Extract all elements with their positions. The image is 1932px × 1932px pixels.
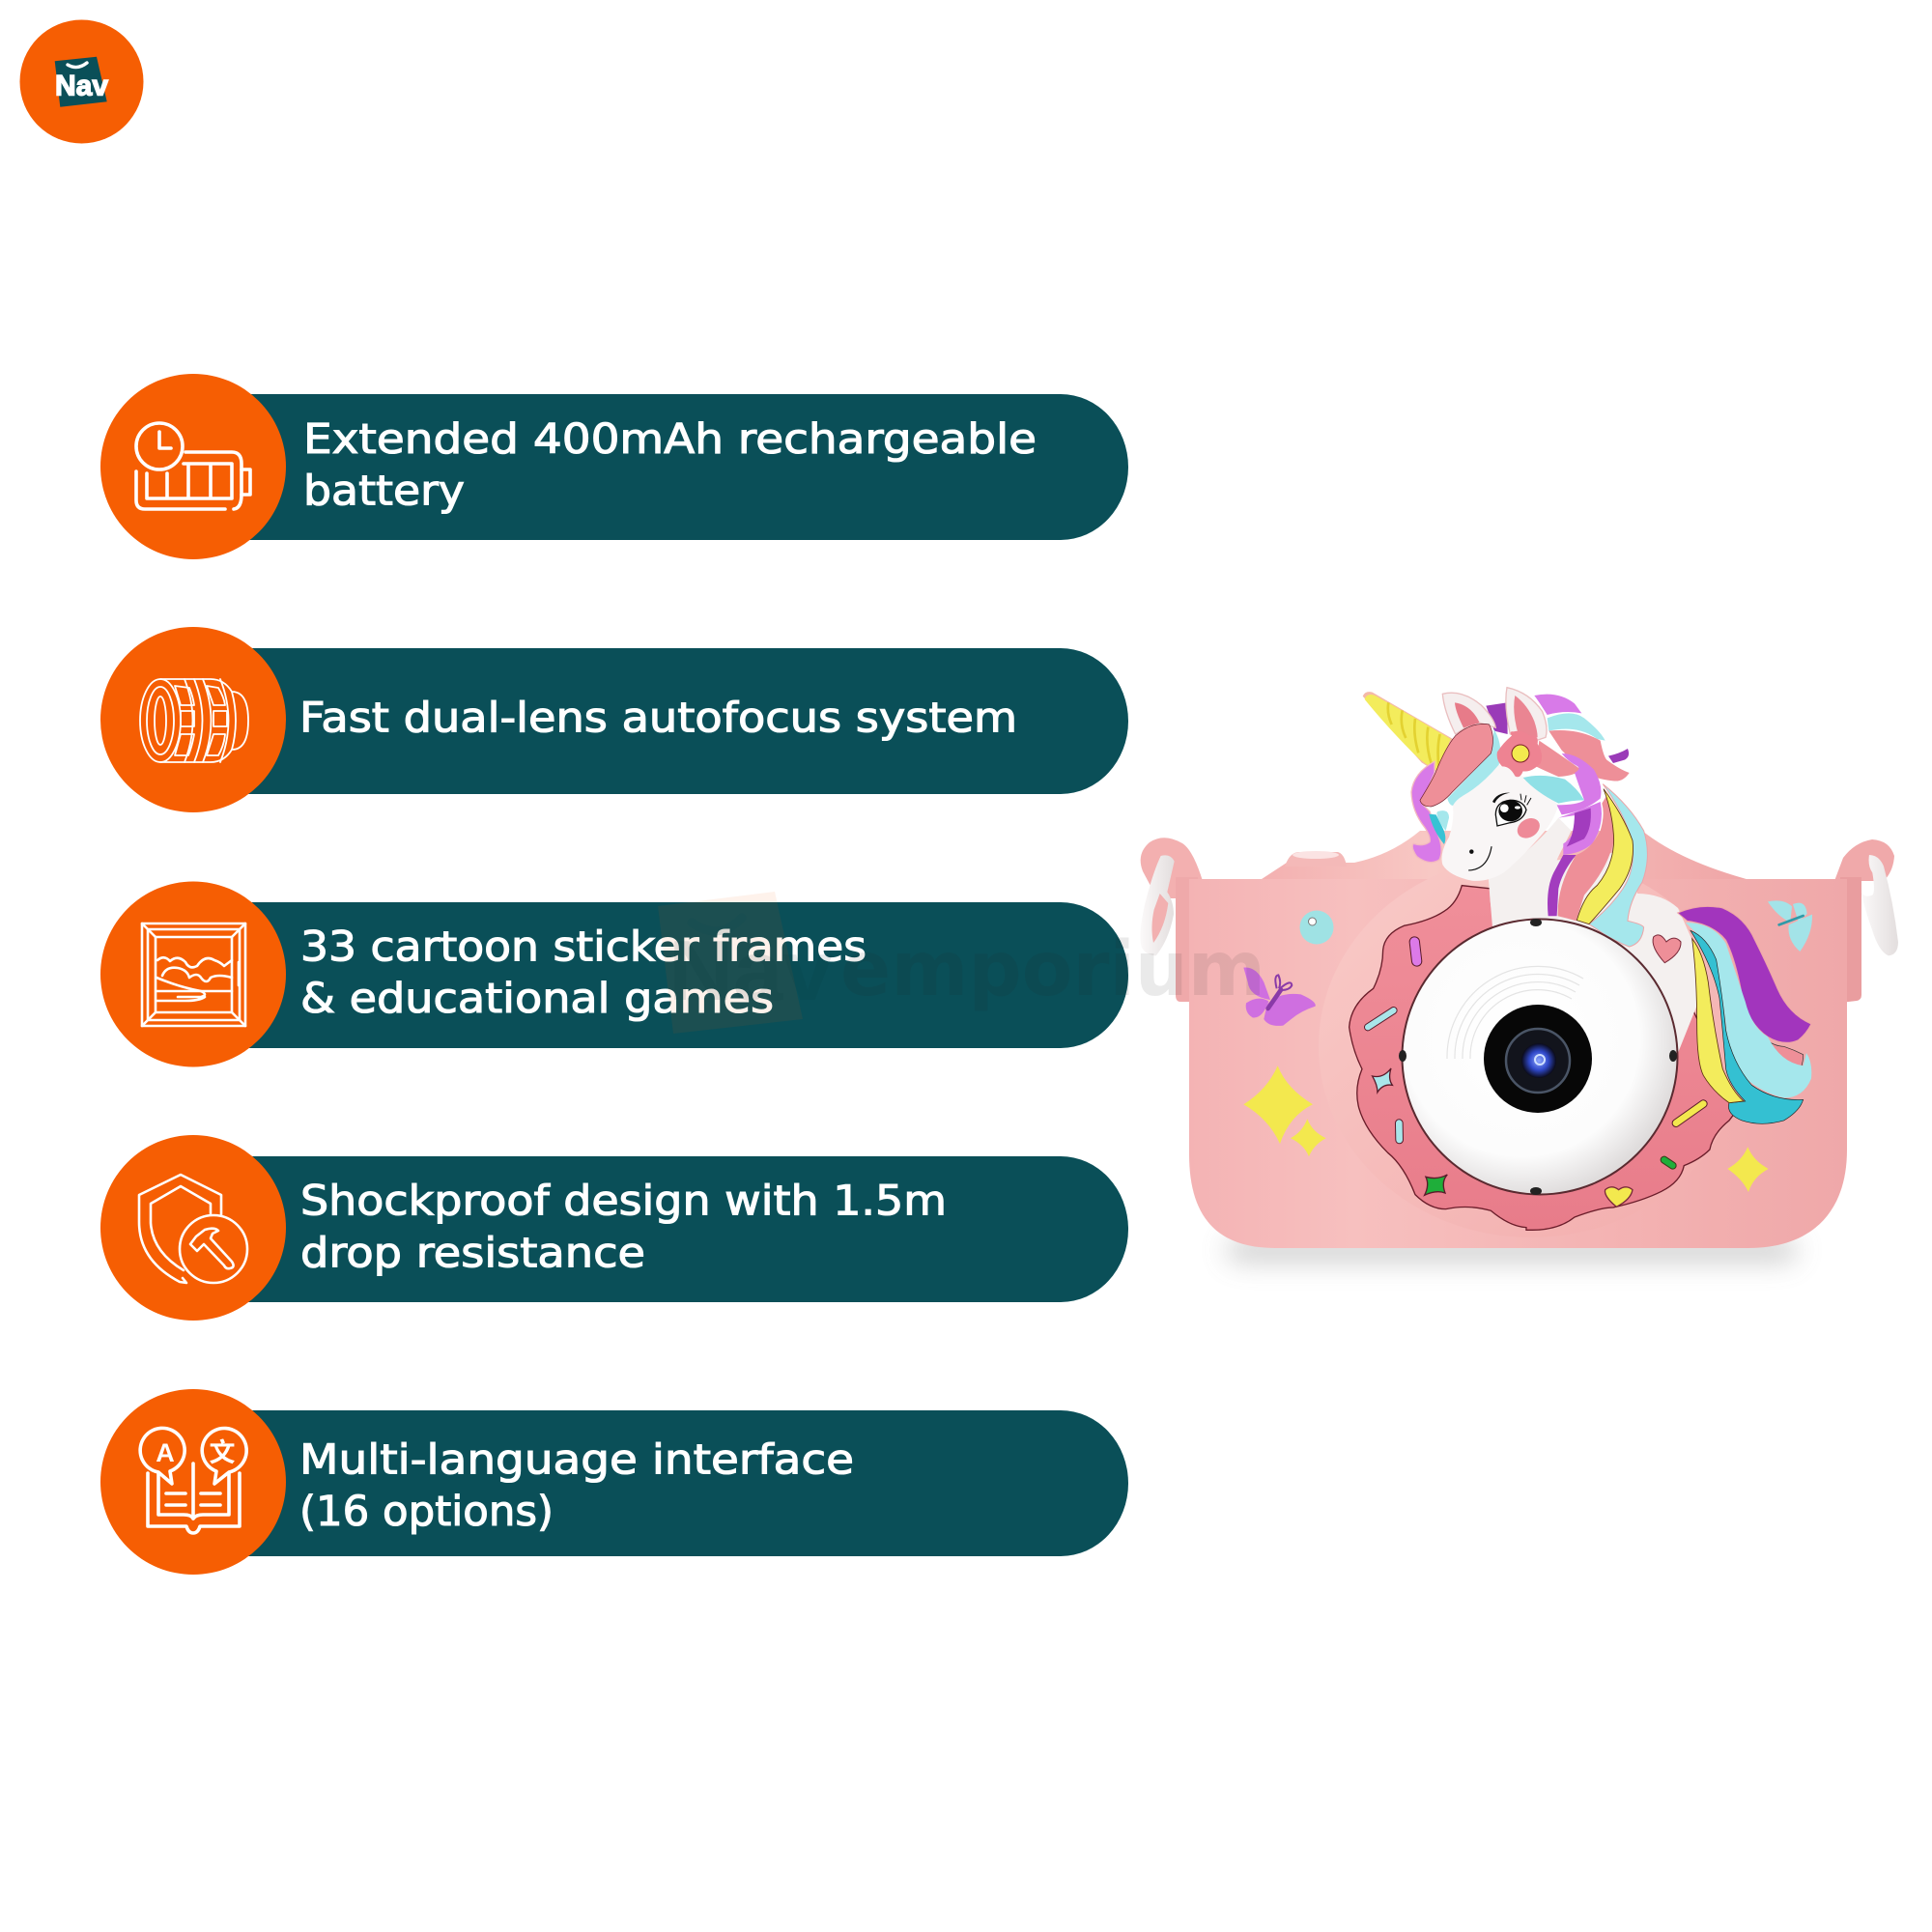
donut frame (1350, 886, 1739, 1230)
feature row: shockproof (100, 1135, 1128, 1321)
horn (1363, 692, 1453, 773)
back hair aqua (1436, 810, 1449, 831)
unicorn head and mane (1363, 688, 1647, 947)
neck mane aqua (1589, 784, 1647, 947)
mane tip purple (1608, 749, 1629, 763)
lens assembly (1399, 918, 1679, 1196)
aqua strand left (1447, 729, 1500, 806)
mane back pink (1548, 730, 1630, 781)
neck mane purple patch (1567, 809, 1591, 847)
shutter button (1285, 851, 1347, 867)
camera body (1189, 879, 1847, 1248)
product: unicorn camera (1141, 688, 1898, 1262)
lens black barrel (1484, 1005, 1592, 1113)
unicorn body (1488, 850, 1697, 1053)
text: shockproof: Shockproof design with 1.5m (300, 1179, 947, 1226)
back hair teal (1429, 814, 1445, 844)
feature row: language (100, 1389, 1128, 1575)
eye (1492, 793, 1531, 826)
icon: book with language bubbles (140, 1428, 246, 1533)
text: frames: 33 cartoon sticker frames (300, 923, 867, 971)
aqua strand right (1523, 776, 1584, 804)
icon letters (156, 1438, 236, 1467)
watermark smile (692, 918, 742, 931)
tail yellow (1692, 939, 1744, 1103)
tail purple (1678, 906, 1811, 1042)
icon: landscape frame (142, 923, 245, 1026)
unicorn tail (1678, 906, 1811, 1123)
badge: battery (100, 374, 286, 559)
cheek (1514, 814, 1544, 842)
right strap lug (1834, 839, 1894, 881)
pill: frames (193, 902, 1128, 1048)
icon: shield and hammer (139, 1175, 247, 1283)
pill: lens (193, 648, 1128, 794)
text: language: (16 options) (299, 1489, 554, 1536)
tail pink (1761, 1037, 1804, 1075)
logo wordmark: Nav (55, 71, 108, 102)
lens bulge (1319, 855, 1744, 1237)
text: frames (300, 923, 867, 1023)
camera top hump (1259, 831, 1753, 881)
pink band (1536, 741, 1581, 777)
text: battery: Extended 400mAh rechargeable (303, 416, 1037, 464)
watermark Nav: Nav (668, 923, 833, 1018)
lens rim (1401, 918, 1679, 1196)
butterfly sticker purple (1243, 968, 1316, 1026)
text: frames: & educational games (300, 976, 774, 1023)
mane back purple (1486, 702, 1508, 734)
pill: shockproof (193, 1156, 1128, 1302)
text: lens: Fast dual-lens autofocus system (299, 696, 1017, 743)
text: battery (303, 416, 1037, 516)
right strap ring (1861, 855, 1898, 955)
neck mane orchid (1558, 802, 1602, 855)
back hair orchid (1411, 761, 1441, 863)
lens notches (1399, 919, 1677, 1195)
left side flap (1176, 877, 1198, 1002)
feature row: frames (100, 881, 1128, 1066)
icon letters: A (156, 1438, 175, 1467)
watermark: Nav Emporium (658, 892, 1265, 1034)
flower (1497, 731, 1542, 777)
tail aqua (1686, 923, 1811, 1098)
face (1441, 763, 1558, 881)
watermark bag (658, 892, 803, 1034)
icon: camera lens (140, 679, 248, 762)
feature row: lens (100, 627, 1128, 812)
badge: lens (100, 627, 286, 812)
badge: language (100, 1389, 286, 1575)
mane top orchid (1534, 695, 1581, 715)
left ear (1442, 693, 1495, 734)
right side flap (1840, 877, 1861, 1003)
lens glint (1521, 1043, 1556, 1078)
text: shockproof: drop resistance (300, 1231, 645, 1278)
right ear (1506, 688, 1547, 741)
orchid strand (1557, 753, 1601, 814)
icon letters: 文 (209, 1438, 236, 1467)
sparkle stickers left (1243, 1065, 1326, 1156)
aqua dot sticker (1300, 910, 1333, 945)
icon: battery with clock (136, 423, 250, 509)
lens inner ring (1506, 1029, 1570, 1093)
badge: frames (100, 881, 286, 1066)
butterfly sticker aqua (1768, 900, 1812, 952)
text: language (299, 1437, 854, 1536)
nose and smile (1469, 847, 1492, 870)
donut sprinkles right (1605, 1104, 1703, 1207)
badge: shockproof (100, 1135, 286, 1321)
sparkle sticker right (1727, 1147, 1769, 1192)
neck mane purple strip (1548, 855, 1577, 916)
watermark wordmark: emporium (840, 926, 1265, 1013)
left strap lug (1141, 838, 1203, 898)
neck (1490, 818, 1572, 921)
pill: language (193, 1410, 1128, 1556)
logo badge (19, 19, 143, 143)
text: shockproof (300, 1179, 947, 1278)
camera shadow (1227, 1238, 1797, 1262)
forelock (1420, 724, 1492, 807)
neck mane yellow (1577, 789, 1634, 924)
text: language: Multi-language interface (299, 1437, 854, 1485)
mane top aqua (1548, 713, 1605, 741)
text: battery: battery (303, 469, 465, 516)
pill: battery (193, 394, 1128, 540)
left strap ring (1141, 855, 1175, 955)
heart on unicorn (1653, 935, 1681, 963)
neck mane pink (1558, 795, 1614, 921)
feature row: battery (100, 374, 1128, 559)
donut sprinkles (1368, 942, 1447, 1195)
tail teal (1690, 930, 1804, 1123)
lens ridges (1447, 966, 1583, 1059)
lens face (1403, 920, 1677, 1194)
